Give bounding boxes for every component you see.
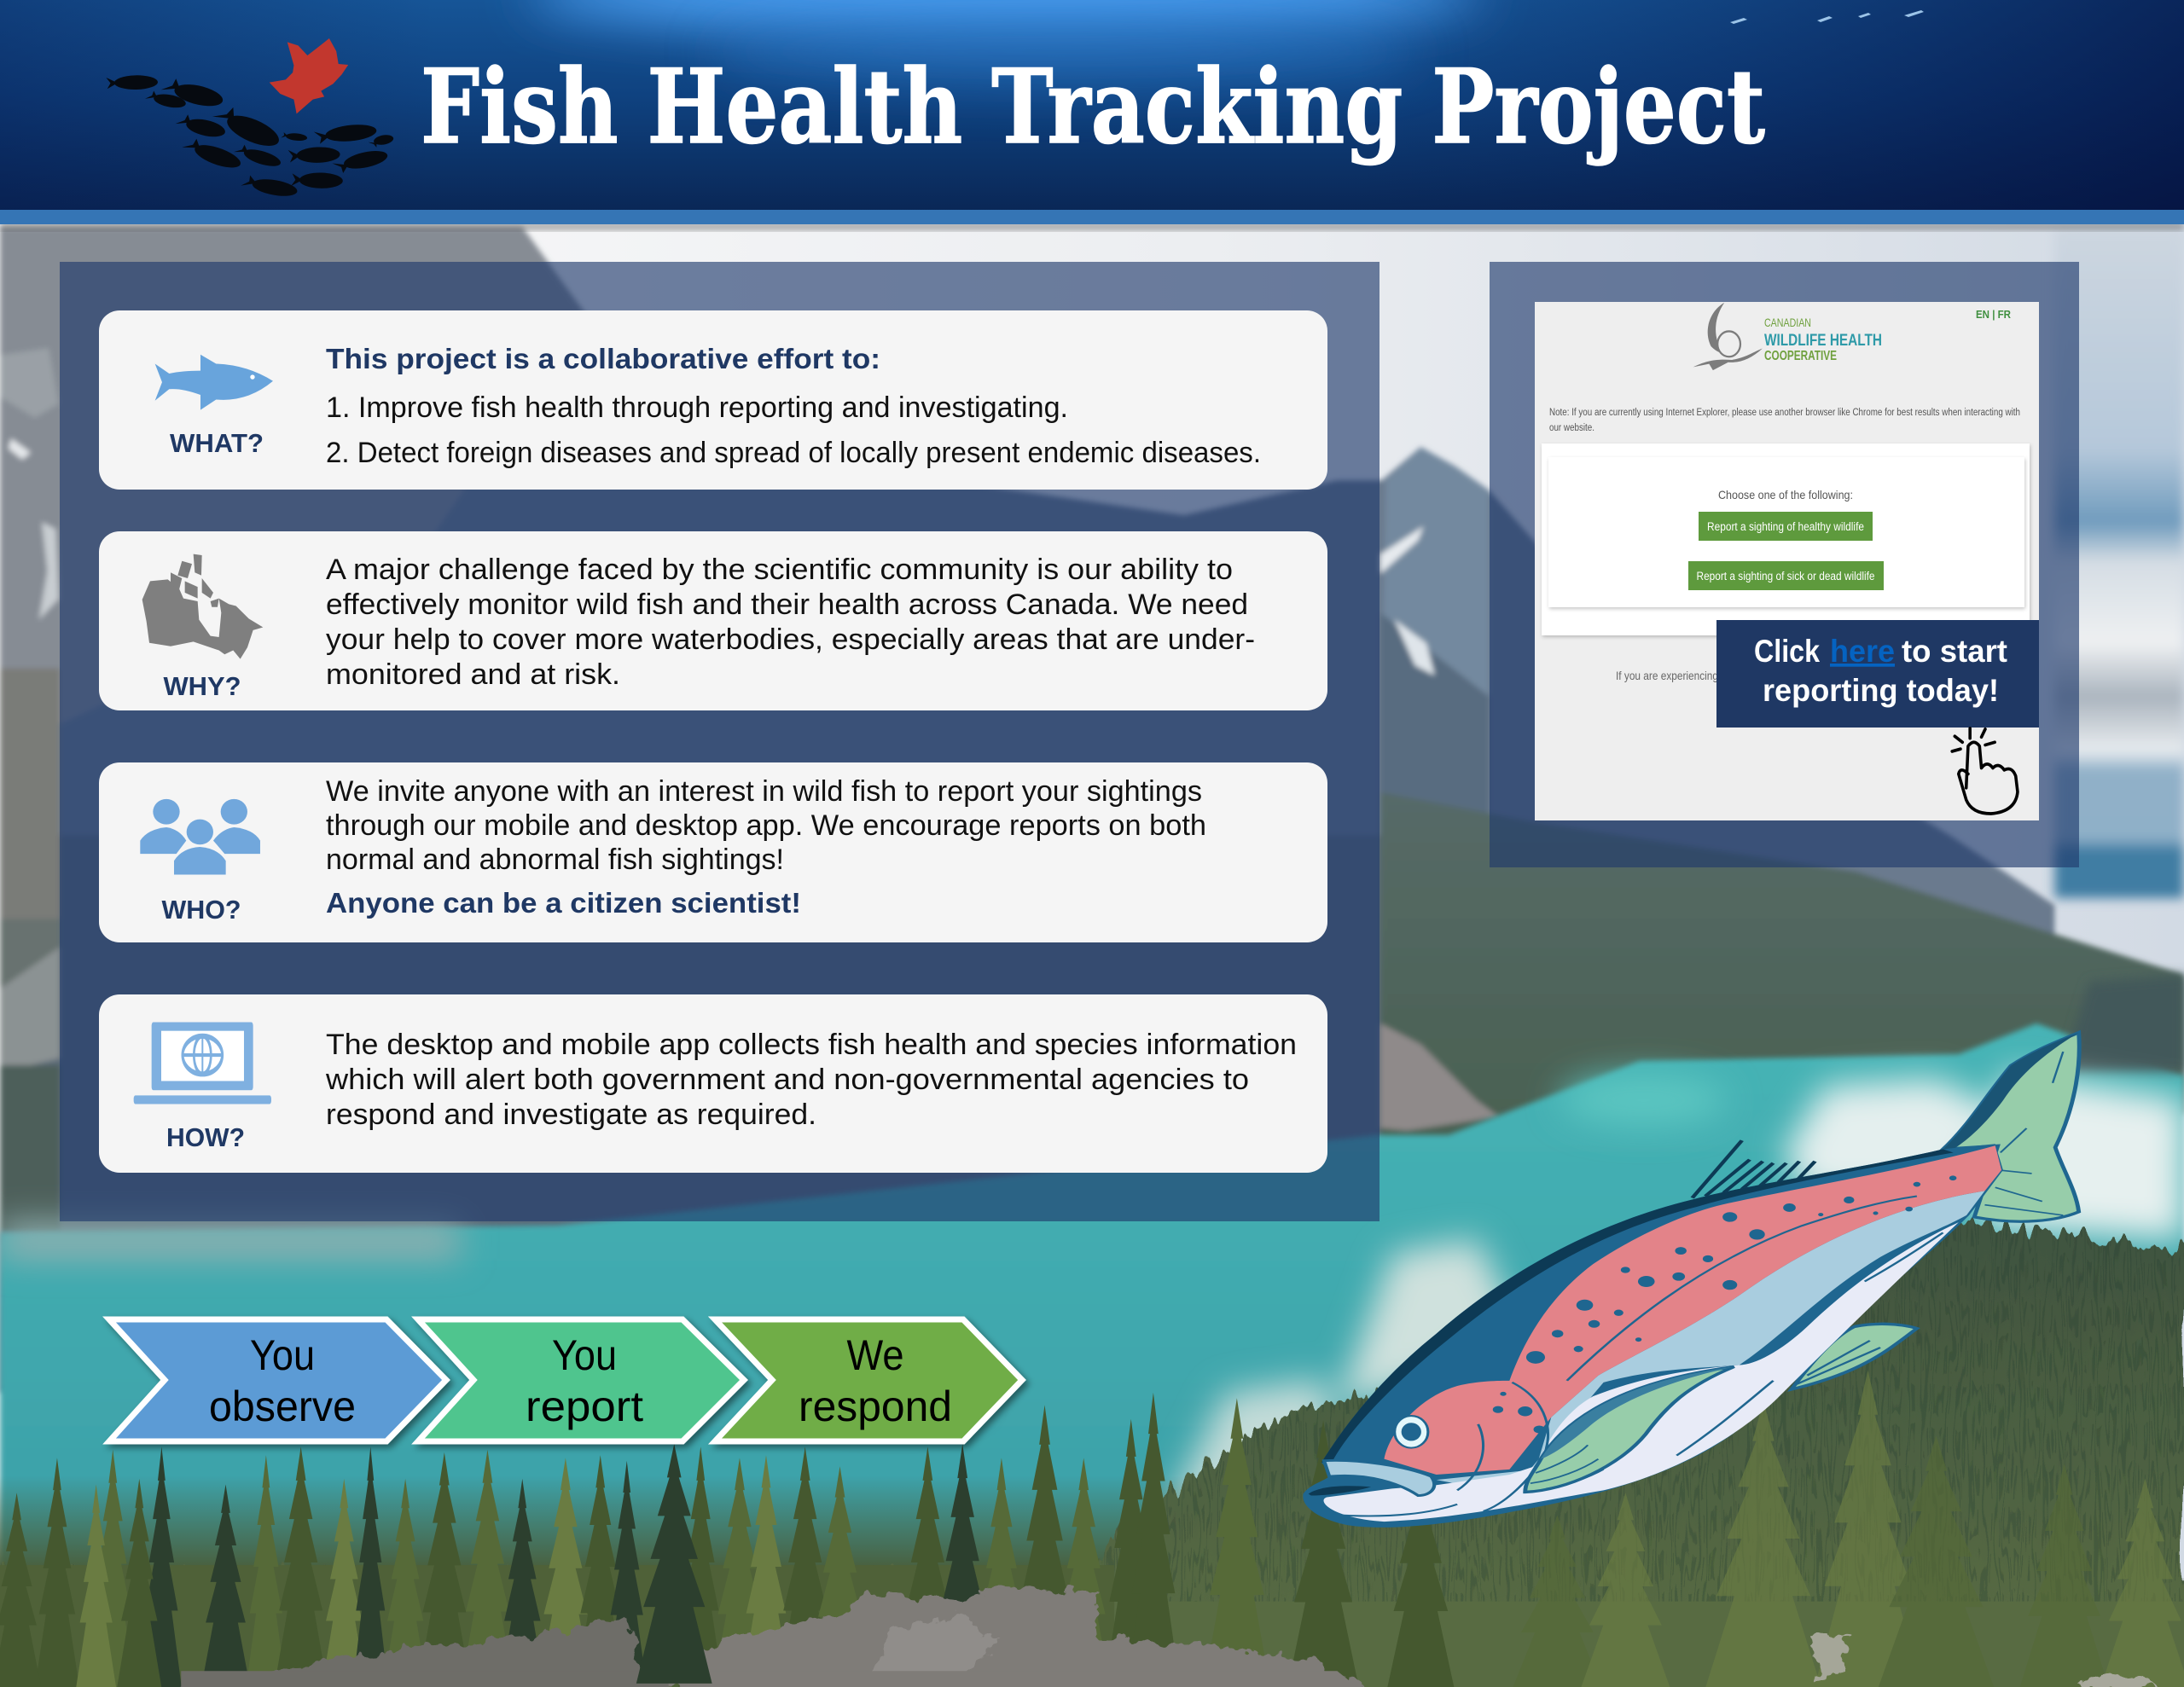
text block: how [325, 1029, 1297, 1131]
process chevrons [109, 1319, 1022, 1441]
snout [1324, 1460, 1434, 1496]
label: who: WHO? [162, 895, 241, 925]
text block: why: effectively monitor wild fish and their health across Canada. We need [326, 588, 1248, 621]
light blue flank [1437, 1191, 1984, 1493]
prompt: Choose one of the following: [1718, 488, 1853, 501]
icon: maple leaf [270, 38, 348, 113]
callout: click here: Click [1754, 634, 1820, 669]
icon: people [140, 799, 260, 874]
screenshot [1535, 302, 2039, 820]
lateral line and gill [1332, 1196, 1943, 1516]
inner form card [1548, 457, 2024, 607]
callout: click here [1716, 620, 2039, 728]
text block: who [326, 775, 1206, 876]
text block: why [326, 554, 1255, 691]
body outline [1303, 1144, 2003, 1528]
tail fin [1943, 1033, 2079, 1221]
pink stripe and cheek [1384, 1145, 2001, 1475]
button: healthy: Report a sighting of healthy wildlife [1707, 520, 1864, 533]
button: sick or dead [1688, 561, 1884, 590]
icon: fish school [106, 75, 398, 200]
icon: fish [155, 355, 273, 410]
list item 1: 1. Improve fish health through reporting and investigating. [326, 391, 1068, 424]
hillside of conifers [0, 1221, 2184, 1687]
chevron: you report: report [526, 1383, 643, 1430]
list item 2: 2. Detect foreign diseases and spread of locally present endemic diseases. [326, 437, 1261, 469]
mouth [1309, 1486, 1371, 1496]
browser note: our website. [1549, 423, 1594, 433]
chevron: we respond [715, 1319, 1022, 1441]
callout: click here: here [1830, 634, 1895, 669]
logo: wordmark: CANADIAN [1764, 316, 1811, 329]
browser note [1549, 408, 2020, 433]
illustration: rainbow trout [1303, 1033, 2079, 1528]
header banner [0, 0, 2184, 230]
label: what: WHAT? [170, 428, 264, 458]
logo: wordmark [1764, 316, 1882, 363]
card: what [99, 310, 1327, 490]
callout: click here: reporting today! [1763, 673, 1999, 708]
icon: pointing hand [1952, 728, 2018, 814]
language switch: EN | FR [1976, 308, 2012, 321]
dark back [1321, 1149, 1954, 1463]
chevron: you report: You [552, 1331, 617, 1379]
panel: reporting website screenshot [1490, 262, 2079, 867]
chevron: you observe: You [250, 1331, 315, 1379]
card: who [99, 762, 1327, 942]
outer form card [1542, 443, 2030, 635]
white belly [1324, 1222, 1959, 1522]
text block: who: normal and abnormal fish sightings! [326, 844, 784, 876]
text block: who: through our mobile and desktop app. We encourage reports on both [326, 809, 1206, 842]
callout: citizen scientist: Anyone can be a citizen scientist! [326, 887, 801, 919]
text block: why: your help to cover more waterbodies, especially areas that are under- [326, 623, 1255, 656]
panel: project information [60, 262, 1380, 1221]
text block: why: A major challenge faced by the scientific community is our ability to [326, 554, 1233, 586]
text block: how: which will alert both government and non-governmental agencies to [325, 1064, 1249, 1096]
ventral fin [1792, 1324, 1917, 1389]
text block: why: monitored and at risk. [326, 658, 620, 691]
text block: how: The desktop and mobile app collects fish health and species information [326, 1029, 1297, 1061]
text block: how: respond and investigate as required. [326, 1099, 816, 1131]
card: why [99, 531, 1327, 710]
chevron: we respond: respond [799, 1383, 952, 1430]
chevron: we respond: We [846, 1331, 904, 1379]
logo: wordmark: COOPERATIVE [1764, 349, 1837, 363]
icon: map of Canada [142, 554, 263, 659]
icon: school of fish forming Canada with maple leaf [106, 38, 398, 200]
chevron: you report [418, 1319, 744, 1441]
label: how: HOW? [166, 1122, 245, 1152]
dorsal fin [1693, 1140, 1815, 1198]
support note: If you are experiencing [1616, 669, 1718, 682]
spots [1493, 1175, 1956, 1433]
eye [1395, 1416, 1428, 1448]
callout: click here: to start [1902, 634, 2007, 669]
label: why: WHY? [164, 671, 241, 701]
icon: laptop with globe [134, 1023, 271, 1104]
button: healthy [1699, 512, 1873, 541]
rocks [174, 1589, 2159, 1687]
button: sick or dead: Report a sighting of sick or dead wildlife [1696, 570, 1875, 583]
title: Fish Health Tracking Project [421, 47, 1765, 167]
browser note: Note: If you are currently using Internet Explorer, please use another browser like Chrome for best results when interacting with [1549, 408, 2020, 418]
card: how [99, 994, 1327, 1173]
heading: collaborative effort: This project is a collaborative effort to: [326, 343, 880, 374]
logo: wordmark: WILDLIFE HEALTH [1764, 332, 1882, 350]
chevron: you observe: observe [209, 1383, 356, 1430]
pectoral fin [1525, 1366, 1734, 1492]
logo: bird [1693, 303, 1763, 370]
text block: who: We invite anyone with an interest in wild fish to report your sightings [326, 775, 1202, 808]
chevron: you observe [109, 1319, 446, 1441]
foreground trees [0, 1371, 2184, 1687]
